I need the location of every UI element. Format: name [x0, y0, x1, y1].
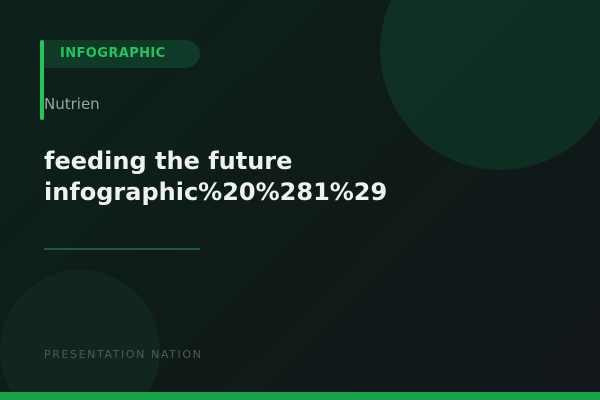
bottom bar: [0, 392, 600, 400]
tag pill: [44, 40, 200, 68]
decorative circle top right: [380, 0, 600, 170]
title: infographic%20%281%29: [44, 178, 387, 206]
accent bar: [40, 40, 44, 120]
subtitle: Nutrien: [44, 95, 100, 113]
title: [44, 147, 387, 206]
decorative circle bottom left: [0, 270, 160, 400]
footer text: PRESENTATION NATION: [44, 348, 202, 361]
divider: [44, 248, 200, 250]
tag pill: INFOGRAPHIC: [60, 46, 166, 61]
title: feeding the future: [44, 147, 292, 175]
